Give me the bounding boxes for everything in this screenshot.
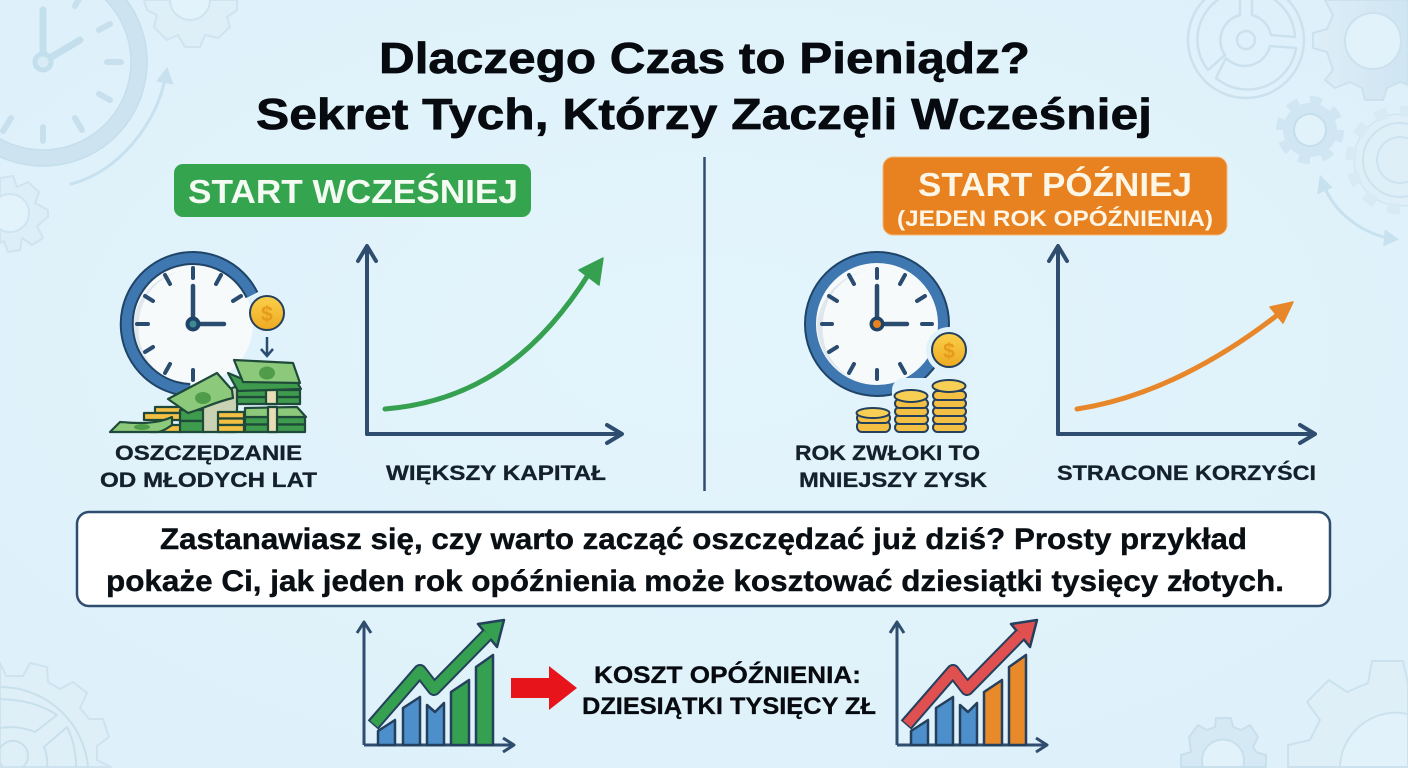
badge: start later xyxy=(883,157,1227,235)
panel: start later xyxy=(795,157,1316,492)
label: lost benefits: STRACONE KORZYŚCI xyxy=(1057,460,1316,485)
decorative arrow right xyxy=(1319,178,1396,244)
decorative wheel top right xyxy=(1188,0,1304,98)
label: year of delay: ROK ZWŁOKI TO xyxy=(795,441,980,465)
callout: Zastanawiasz się, czy warto zacząć oszczędzać już dziś? Prosty przykład xyxy=(160,523,1247,556)
arrow: red xyxy=(511,666,577,710)
badge: start earlier xyxy=(174,164,531,217)
icon: clock with money: $ xyxy=(261,303,273,326)
panel: start earlier xyxy=(100,164,622,492)
decorative background clock top left xyxy=(0,0,173,184)
text: cost of delay: DZIESIĄTKI TYSIĘCY ZŁ xyxy=(582,693,876,720)
decorative small gear right xyxy=(1281,101,1339,159)
icon: clock with coins: $ xyxy=(943,340,955,363)
decorative large gear top right xyxy=(1313,0,1408,100)
label: larger capital: WIĘKSZY KAPITAŁ xyxy=(386,461,606,485)
label: saving from a young age xyxy=(100,441,317,492)
title: Dlaczego Czas to Pieniądz? xyxy=(379,34,1030,83)
chart: larger capital xyxy=(358,246,622,443)
decorative gear bottom right xyxy=(1288,661,1408,767)
icon: clock with coins xyxy=(811,258,972,436)
callout: pokaże Ci, jak jeden rok opóźnienia może kosztować dziesiątki tysięcy złotych. xyxy=(106,565,1284,598)
badge: start earlier: START WCZEŚNIEJ xyxy=(188,173,518,210)
icon: clock with money xyxy=(110,258,306,432)
decorative outlined gear right xyxy=(1351,111,1408,209)
text: cost of delay xyxy=(582,661,876,720)
title xyxy=(256,34,1152,139)
label: year of delay xyxy=(795,441,988,492)
title: Sekret Tych, Którzy Zaczęli Wcześniej xyxy=(256,90,1152,139)
label: saving from a young age: OSZCZĘDZANIE xyxy=(115,441,302,465)
badge: start later: (JEDEN ROK OPÓŹNIENIA) xyxy=(897,206,1213,231)
badge: start later: START PÓŹNIEJ xyxy=(918,166,1192,203)
label: saving from a young age: OD MŁODYCH LAT xyxy=(100,468,317,492)
chart icon: early growth xyxy=(357,620,514,752)
decorative gear bottom left xyxy=(0,663,111,767)
chart icon: late growth xyxy=(890,620,1047,752)
central divider xyxy=(703,157,706,491)
decorative gear top xyxy=(144,0,237,47)
text: cost of delay: KOSZT OPÓŹNIENIA: xyxy=(594,661,861,689)
chart: lost benefits xyxy=(1049,246,1315,443)
decorative gear bottom centre right xyxy=(1181,718,1266,767)
label: year of delay: MNIEJSZY ZYSK xyxy=(799,468,988,492)
callout xyxy=(77,512,1330,606)
decorative gear left xyxy=(0,176,48,252)
